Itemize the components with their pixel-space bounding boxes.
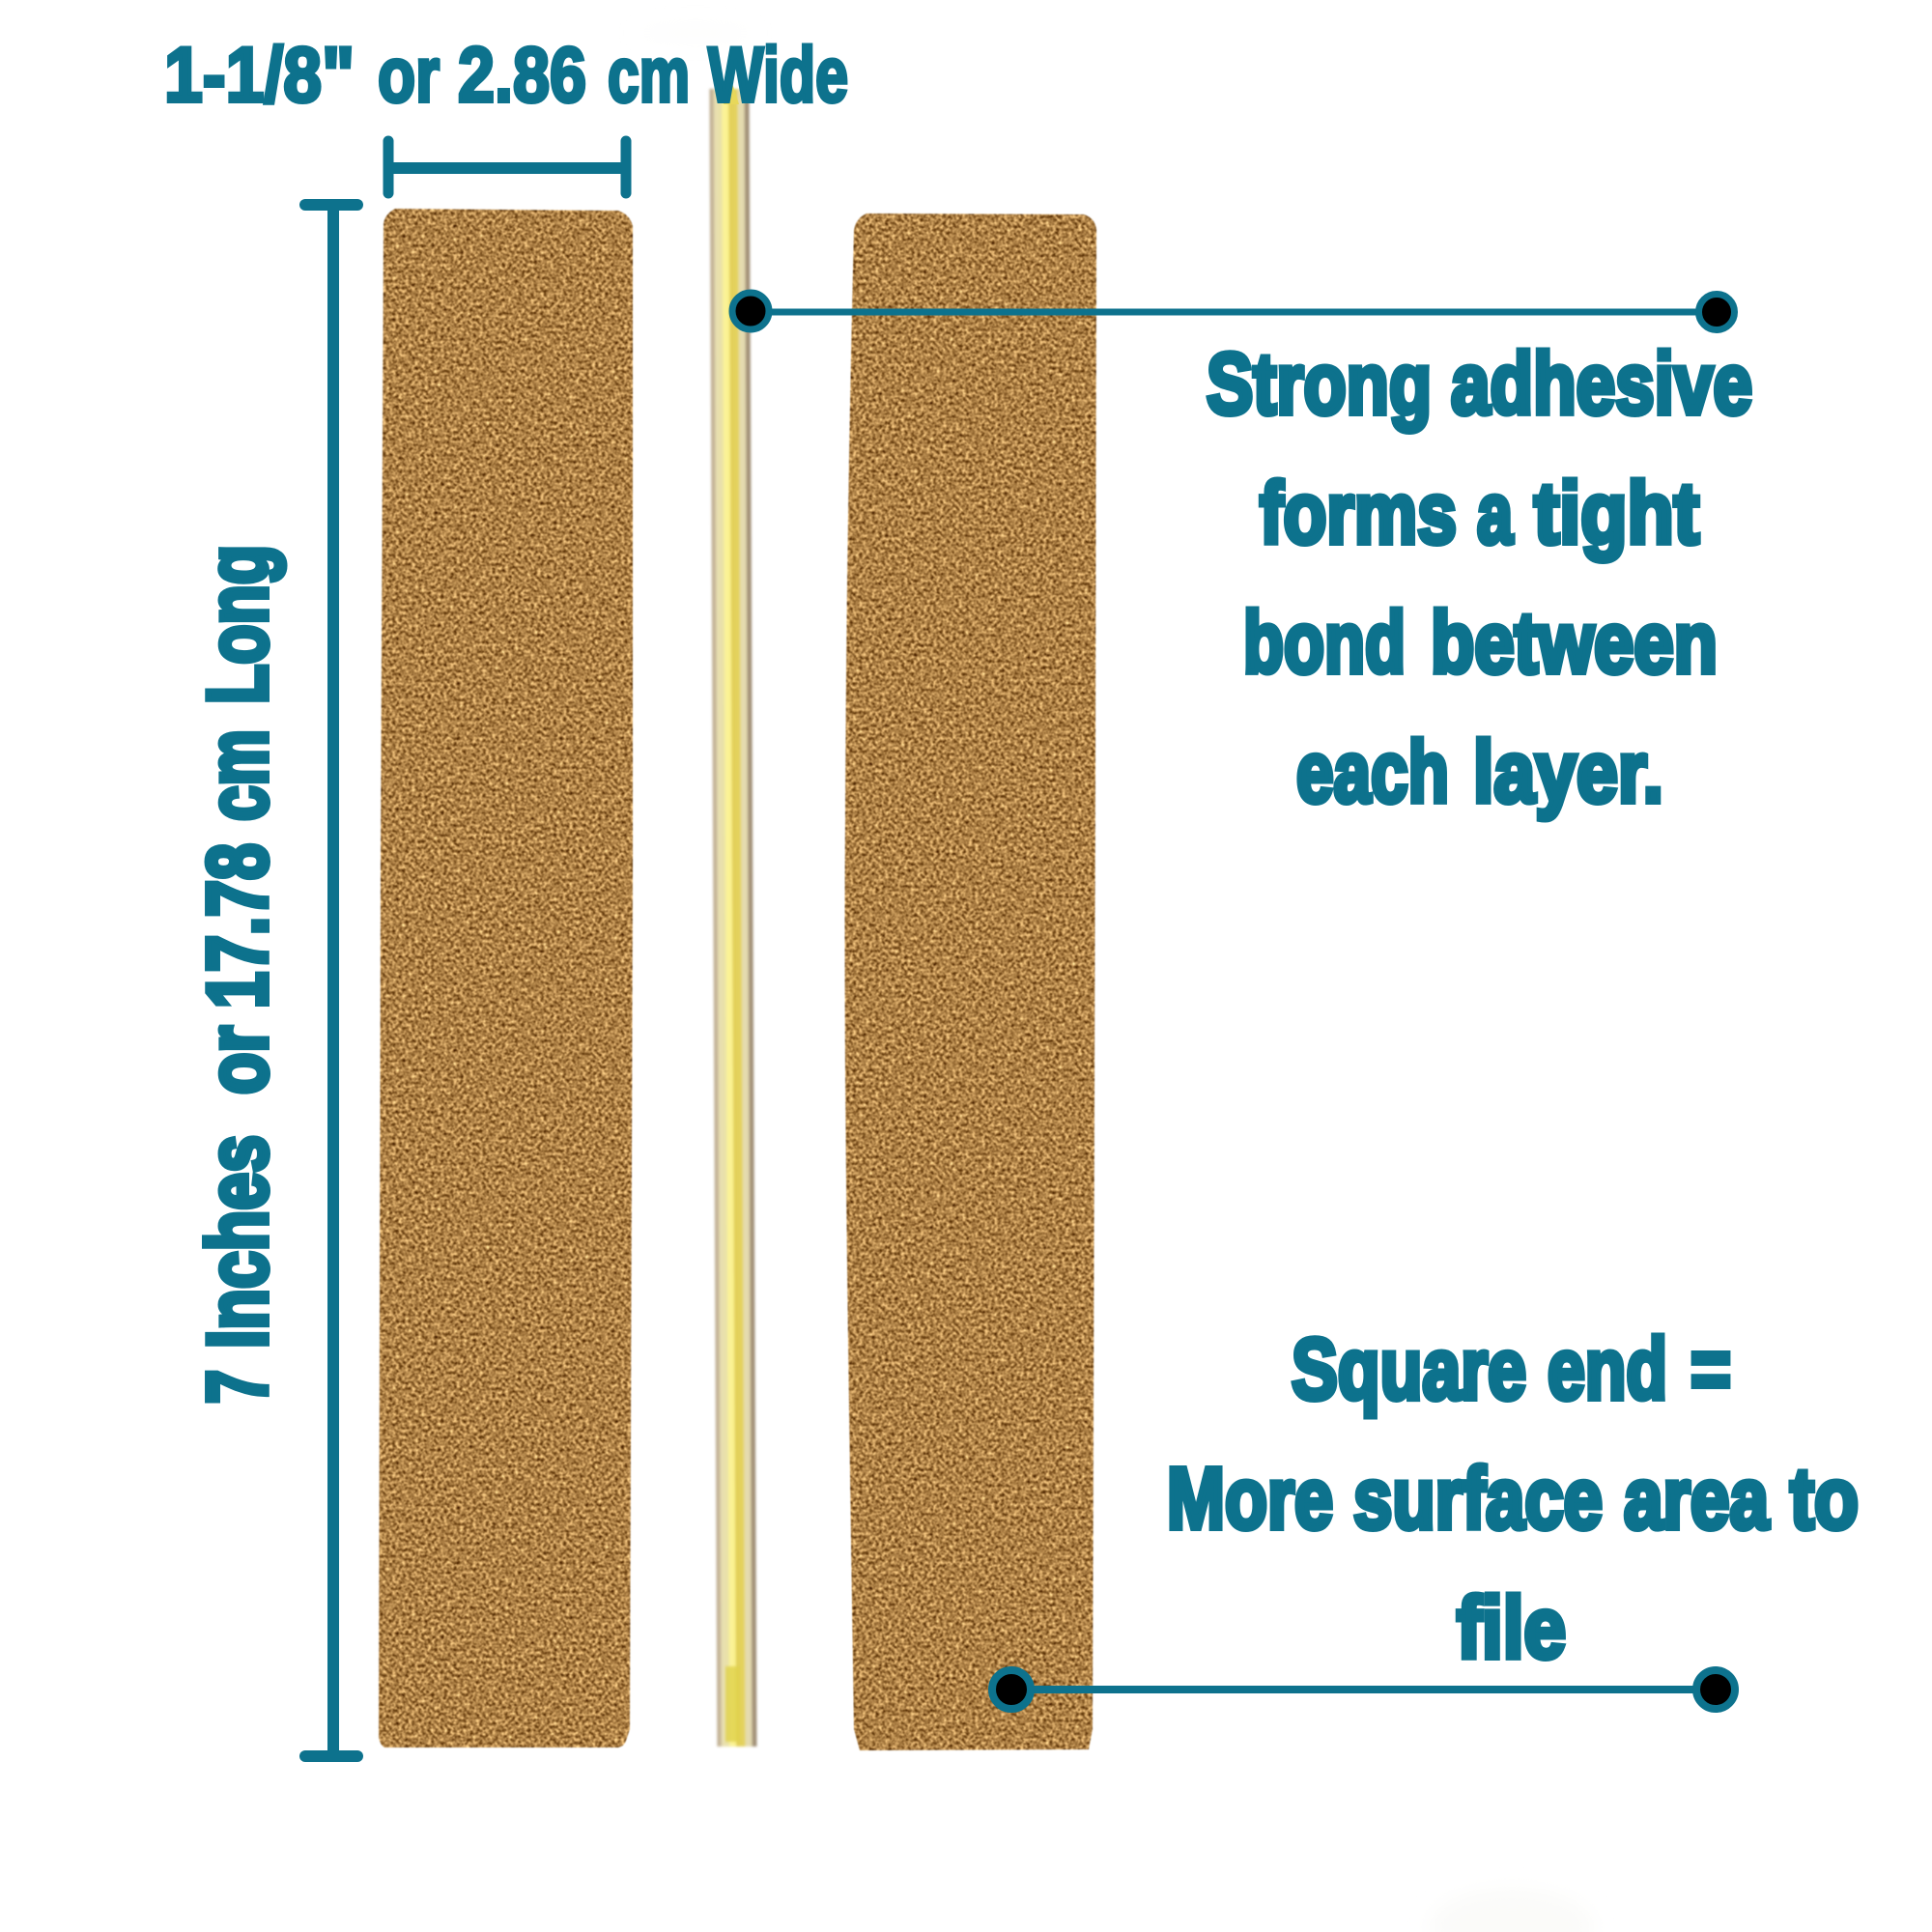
- adhesive callout text: [1207, 336, 1752, 821]
- adhesive callout text: tight: [1534, 466, 1699, 562]
- adhesive callout text: between: [1431, 595, 1718, 692]
- length dimension label: cm: [189, 729, 285, 821]
- adhesive callout text: Strong: [1207, 336, 1432, 433]
- faint background smudges: [638, 29, 1594, 1932]
- adhesive callout text: each: [1296, 724, 1449, 821]
- square end callout text: =: [1690, 1321, 1731, 1418]
- width bracket: [388, 141, 626, 193]
- square end callout text: end: [1548, 1321, 1667, 1418]
- length dimension label: Inches: [189, 1135, 285, 1349]
- length dimension label: Long: [189, 545, 285, 704]
- width dimension label: 2.86: [458, 32, 586, 119]
- square end callout text: surface: [1353, 1451, 1603, 1548]
- width dimension label: [164, 32, 848, 119]
- length dimension label: 7: [189, 1370, 285, 1404]
- adhesive callout text: forms: [1260, 466, 1457, 562]
- width dimension label: or: [378, 32, 440, 119]
- adhesive callout text: bond: [1243, 595, 1406, 692]
- width dimension label: 1-1/8": [164, 32, 355, 119]
- square end callout line with end dots: [992, 1670, 1735, 1709]
- square end callout text: to: [1790, 1451, 1859, 1548]
- adhesive callout text: a: [1477, 466, 1514, 562]
- right cork strip: [845, 213, 1096, 1750]
- length dimension label: or: [189, 1026, 285, 1094]
- length bracket: [305, 205, 357, 1756]
- square end callout text: file: [1457, 1580, 1566, 1677]
- square end callout text: area: [1624, 1451, 1770, 1548]
- middle strip: side edge with yellow adhesive layer: [709, 80, 756, 1747]
- adhesive callout line with end dots: [732, 293, 1735, 330]
- width dimension label: cm: [608, 32, 690, 119]
- square end callout text: More: [1167, 1451, 1333, 1548]
- square end callout text: [1167, 1321, 1859, 1677]
- adhesive callout text: adhesive: [1451, 336, 1752, 433]
- left cork strip: [379, 209, 633, 1747]
- adhesive callout text: layer.: [1473, 724, 1663, 821]
- width dimension label: Wide: [708, 32, 848, 119]
- length dimension label: 17.78: [189, 843, 285, 1009]
- square end callout text: Square: [1292, 1321, 1526, 1418]
- length dimension label: [189, 545, 285, 1404]
